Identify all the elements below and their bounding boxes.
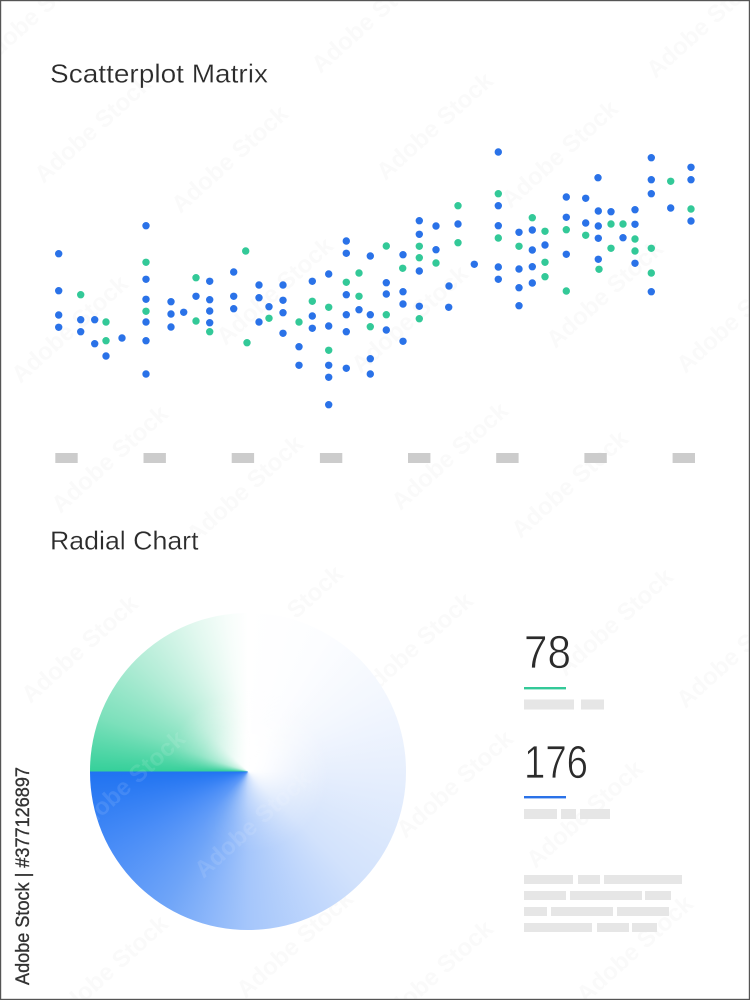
green rule — [524, 687, 566, 689]
placeholder caption — [524, 809, 610, 819]
watermark pattern: Adobe Stock — [506, 425, 634, 544]
watermark pattern: Adobe Stock — [16, 590, 144, 709]
watermark pattern: Adobe Stock — [541, 235, 669, 354]
watermark pattern: Adobe Stock — [551, 563, 679, 682]
stat: 78 green — [524, 626, 604, 710]
watermark pattern: Adobe Stock — [521, 755, 649, 874]
watermark pattern: Adobe Stock — [231, 885, 359, 1000]
title: scatterplot matrix: Scatterplot Matrix — [50, 58, 268, 88]
value 78: 78 — [524, 626, 571, 678]
value 176: 176 — [524, 736, 588, 788]
watermark pattern: Adobe Stock — [29, 70, 157, 189]
blue rule — [524, 796, 566, 798]
watermark over radial chart: Adobe Stock — [189, 765, 317, 884]
stat: 176 blue — [524, 736, 610, 819]
watermark pattern: Adobe Stock — [386, 397, 514, 516]
watermark pattern: Adobe Stock — [351, 587, 479, 706]
watermark pattern: Adobe Stock — [166, 100, 294, 219]
watermark pattern: Adobe Stock — [346, 260, 474, 379]
watermark pattern: Adobe Stock — [181, 430, 309, 549]
watermark pattern: Adobe Stock — [221, 560, 349, 679]
blue data points — [55, 148, 695, 408]
watermark pattern: Adobe Stock — [496, 95, 624, 214]
watermark pattern: Adobe Stock — [46, 400, 174, 519]
green data points — [77, 178, 695, 354]
stock id label: Adobe Stock | #377126897 — [13, 767, 34, 985]
watermark over radial chart — [63, 725, 317, 884]
radial chart — [90, 613, 406, 930]
x axis placeholder labels — [55, 453, 695, 463]
placeholder caption — [524, 700, 604, 710]
watermark pattern: Adobe Stock — [6, 270, 134, 389]
watermark pattern: Adobe Stock — [391, 725, 519, 844]
placeholder paragraph — [524, 875, 682, 932]
watermark pattern: Adobe Stock — [211, 232, 339, 351]
scatterplot — [55, 148, 695, 408]
title: radial chart: Radial Chart — [50, 526, 199, 556]
watermark pattern: Adobe Stock — [371, 67, 499, 186]
watermark over radial chart: Adobe Stock — [63, 725, 191, 844]
